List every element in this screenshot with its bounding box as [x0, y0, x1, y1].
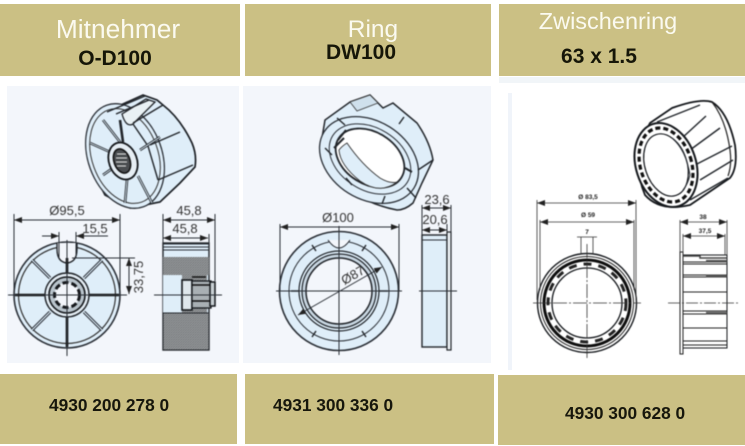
drawing: Ring side view: [419, 192, 457, 350]
drawing: Ring side view: 20,6: [422, 212, 448, 227]
header: Ring DW100: Ring: [348, 16, 398, 43]
panel: Zwischenring drawing background: [499, 77, 745, 370]
drawing: Zwischenring front view: 7: [585, 229, 589, 236]
drawing: Ring front view: Ø87: [338, 262, 367, 288]
drawing: Zwischenring front view: Ø 59: [581, 212, 595, 219]
drawing: Zwischenring side view: [668, 214, 739, 354]
header: Mitnehmer O-D100: Mitnehmer: [56, 14, 180, 44]
header: Zwischenring 63 x 1.5: [499, 4, 745, 76]
drawing: Mitnehmer side section view: [154, 203, 222, 350]
drawing: Zwischenring front view: [533, 194, 641, 358]
drawing: Zwischenring side view: 37,5: [699, 228, 712, 235]
drawing: Mitnehmer front view: Ø95,5: [49, 203, 85, 218]
footer: article number 4930 300 628 0: 4930 300 628 0: [565, 403, 685, 423]
drawing: Zwischenring front view: Ø 83,5: [578, 194, 598, 201]
header: Ring DW100: DW100: [326, 41, 396, 64]
drawing: Mitnehmer isometric view: [72, 93, 196, 219]
drawing: Mitnehmer front view: [8, 203, 146, 356]
drawing: Mitnehmer front view: 33,75: [131, 261, 146, 293]
drawing: Ring side view: 23,6: [424, 192, 450, 207]
drawing: Zwischenring isometric view: [624, 101, 736, 215]
drawing: Ring isometric view: [303, 95, 435, 221]
header: Mitnehmer O-D100: O-D100: [78, 47, 152, 70]
panel: Ring drawing background: [243, 86, 491, 363]
drawing: Mitnehmer side section view: 45,8: [172, 221, 198, 236]
header: Ring DW100: [245, 4, 491, 76]
drawing: Zwischenring side view: 38: [699, 214, 707, 221]
header: Mitnehmer O-D100: [0, 4, 240, 76]
footer: article number 4930 300 628 0: [498, 375, 745, 445]
footer: article number 4930 200 278 0: 4930 200 278 0: [49, 395, 169, 415]
drawing: Mitnehmer front view: 15,5: [82, 221, 108, 236]
footer: article number 4930 200 278 0: [0, 374, 237, 444]
panel: Mitnehmer drawing background: [7, 86, 239, 363]
footer: article number 4931 300 336 0: 4931 300 336 0: [273, 395, 393, 415]
drawing: Mitnehmer side section view: 45,8: [176, 203, 202, 218]
drawing: Ring front view: [276, 210, 402, 355]
footer: article number 4931 300 336 0: [245, 374, 494, 444]
header: Zwischenring 63 x 1.5: Zwischenring: [539, 8, 677, 34]
drawing: Ring front view: Ø100: [322, 210, 354, 225]
header: Zwischenring 63 x 1.5: 63 x 1.5: [561, 45, 637, 68]
